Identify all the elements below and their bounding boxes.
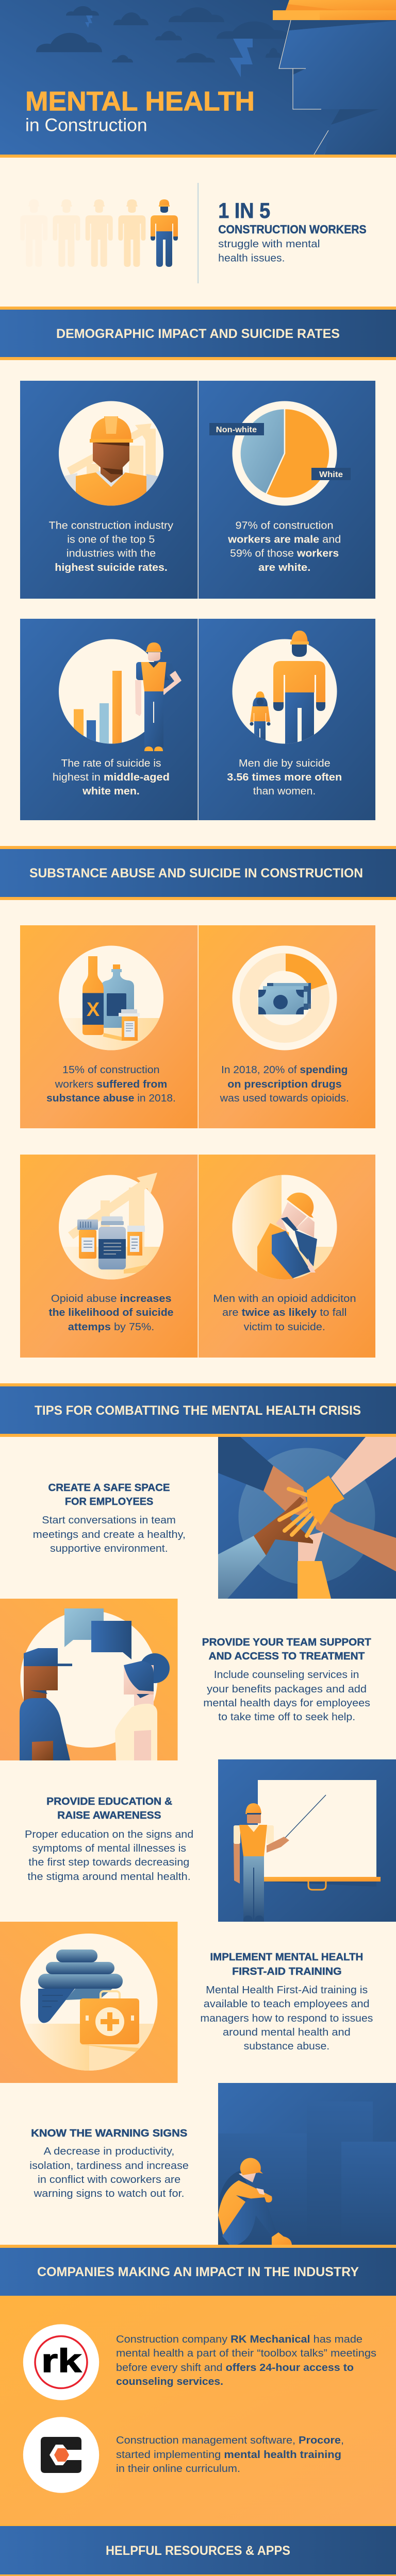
text: 97% of construction xyxy=(235,520,333,532)
text: Men die by suicide xyxy=(239,758,331,769)
icon: stacked hands xyxy=(218,1437,396,1599)
panel: opioid abuse stat xyxy=(20,1155,198,1358)
text: Construction management software, Procore , xyxy=(116,2435,344,2446)
text: The rate of suicide is xyxy=(61,758,161,769)
text: RAISE AWARENESS xyxy=(57,1809,161,1821)
icon: pill bottles and rising chart xyxy=(57,1173,165,1283)
text: than women. xyxy=(253,786,316,797)
pie chart: Non-white xyxy=(216,426,257,434)
text: In 2018, 20% of spending xyxy=(221,1064,348,1076)
text xyxy=(48,1293,173,1333)
text: 1 in 5: health issues. xyxy=(218,253,285,264)
text xyxy=(202,1636,371,1723)
text: mental health a part of their “toolbox talks” meetings xyxy=(116,2348,376,2359)
tip: support and treatment xyxy=(0,1599,371,1760)
text: is one of the top 5 xyxy=(67,534,155,545)
text: white men. xyxy=(82,786,140,797)
panel: top 5 industries xyxy=(20,381,198,599)
text: attemps by 75%. xyxy=(68,1321,154,1333)
subtitle: in Construction xyxy=(25,115,147,135)
text: IMPLEMENT MENTAL HEALTH xyxy=(210,1951,363,1963)
text: meetings and create a healthy, xyxy=(33,1529,186,1540)
icon: bottles: X xyxy=(87,999,100,1021)
text: substance abuse in 2018. xyxy=(46,1093,176,1104)
text: Start conversations in team xyxy=(42,1515,176,1526)
panel: middle-aged white men xyxy=(20,619,198,820)
text: was used towards opioids. xyxy=(220,1093,349,1104)
text: warning signs to watch out for. xyxy=(34,2188,185,2199)
text: before every shift and offers 24-hour access to xyxy=(116,2362,354,2374)
text: PROVIDE EDUCATION & xyxy=(46,1795,172,1807)
pie chart: White xyxy=(319,470,343,479)
text xyxy=(53,758,170,797)
donut chart xyxy=(232,946,337,1050)
icon: standing worker xyxy=(135,642,182,751)
heading banner: tips: TIPS FOR COMBATTING THE MENTAL HEALTH CRISIS xyxy=(35,1403,361,1418)
icon: distressed worker xyxy=(231,1172,338,1283)
text: workers suffered from xyxy=(55,1079,167,1090)
tip: education xyxy=(25,1759,396,1922)
icon: first-aid kit and helmet xyxy=(0,1922,177,2083)
text: around mental health and xyxy=(223,2027,351,2038)
panel: substance abuse stat xyxy=(20,925,198,1128)
logo: rk xyxy=(23,2324,99,2400)
text: victim to suicide. xyxy=(244,1321,325,1333)
logo: Procore xyxy=(23,2417,99,2493)
text: to take time off to seek help. xyxy=(218,1711,355,1723)
text: highest in middle-aged xyxy=(53,772,170,783)
text: started implementing mental health training xyxy=(116,2449,341,2461)
text: the stigma around mental health. xyxy=(27,1871,191,1883)
icon: bottles xyxy=(57,946,165,1054)
text: A decrease in productivity, xyxy=(44,2146,174,2157)
tip: safe space xyxy=(33,1437,396,1599)
text: AND ACCESS TO TREATMENT xyxy=(209,1650,365,1662)
text: CREATE A SAFE SPACE xyxy=(48,1482,170,1494)
text: supportive environment. xyxy=(50,1543,168,1554)
text: the likelihood of suicide xyxy=(48,1307,173,1318)
text: 1 in 5: CONSTRUCTION WORKERS xyxy=(218,223,367,236)
icon: money xyxy=(258,983,311,1014)
text xyxy=(116,2435,344,2475)
text: Proper education on the signs and xyxy=(25,1829,193,1840)
text: in their online curriculum. xyxy=(116,2463,240,2475)
text: substance abuse. xyxy=(244,2041,329,2052)
text xyxy=(33,1482,186,1554)
text xyxy=(48,520,173,573)
text: 59% of those workers xyxy=(230,548,339,560)
text: 1 in 5: struggle with mental xyxy=(218,239,320,250)
icon: storm clouds xyxy=(36,6,290,62)
text: workers are male and xyxy=(227,534,341,545)
text: FIRST-AID TRAINING xyxy=(232,1965,342,1977)
text: The construction industry xyxy=(48,520,173,532)
text: 15% of construction xyxy=(62,1064,160,1076)
text xyxy=(29,2127,189,2199)
icon: man and woman figures xyxy=(250,631,325,744)
panel: opioid addiction stat xyxy=(199,1155,375,1358)
icon: worker at whiteboard xyxy=(218,1759,396,1922)
text: available to teach employees and xyxy=(204,1998,370,2010)
text: industries with the xyxy=(67,548,156,560)
text xyxy=(25,1795,193,1883)
heading banner: companies xyxy=(0,2245,396,2296)
divider: hero stripe xyxy=(0,155,396,158)
text xyxy=(46,1064,176,1104)
panel: 1 in 5 stat xyxy=(20,183,367,283)
text: Opioid abuse increases xyxy=(51,1293,172,1304)
text: Construction company RK Mechanical has made xyxy=(116,2334,362,2345)
icon: head profile with hard hat xyxy=(273,0,396,155)
icon: conversation xyxy=(0,1599,177,1760)
text: in conflict with coworkers are xyxy=(38,2174,180,2185)
text: 3.56 times more often xyxy=(227,772,342,783)
pie chart xyxy=(209,401,351,506)
text: FOR EMPLOYEES xyxy=(65,1496,153,1507)
panel: companies xyxy=(0,2296,396,2524)
text: 1 in 5: 1 IN 5 xyxy=(218,198,270,223)
text: symptoms of mental illnesses is xyxy=(32,1843,186,1854)
text: managers how to respond to issues xyxy=(200,2013,373,2024)
tip: first aid training xyxy=(0,1922,373,2083)
text xyxy=(227,758,342,797)
title: MENTAL HEALTH xyxy=(25,86,255,116)
heading banner: substance abuse xyxy=(0,846,396,900)
icon: sitting worker xyxy=(218,2083,396,2245)
text xyxy=(227,520,341,573)
icon: five workers xyxy=(20,199,178,267)
bar chart xyxy=(74,671,122,748)
text: PROVIDE YOUR TEAM SUPPORT xyxy=(202,1636,371,1648)
heading banner: demographic xyxy=(0,307,396,360)
heading banner: tips xyxy=(0,1383,396,1437)
text xyxy=(213,1293,356,1333)
text: the first step towards decreasing xyxy=(28,1857,189,1868)
text: isolation, tardiness and increase xyxy=(29,2160,189,2172)
panel: spending stat xyxy=(199,925,375,1128)
text: are white. xyxy=(258,562,310,573)
text: Mental Health First-Aid training is xyxy=(206,1985,368,1996)
heading banner: demographic: DEMOGRAPHIC IMPACT AND SUICIDE RATES xyxy=(56,327,340,341)
panel: male and white workers xyxy=(199,381,375,599)
heading banner: substance abuse: SUBSTANCE ABUSE AND SUICIDE IN CONSTRUCTION xyxy=(29,866,363,880)
heading banner: resources: HELPFUL RESOURCES & APPS xyxy=(106,2544,290,2558)
text xyxy=(116,2334,376,2387)
text xyxy=(220,1064,349,1104)
text: on prescription drugs xyxy=(227,1079,342,1090)
text: are twice as likely to fall xyxy=(222,1307,346,1318)
text: Men with an opioid addiciton xyxy=(213,1293,356,1304)
text: counseling services. xyxy=(116,2376,223,2387)
text: mental health days for employees xyxy=(203,1698,370,1709)
heading banner: companies: COMPANIES MAKING AN IMPACT IN THE INDUSTRY xyxy=(37,2265,359,2279)
logo: rk: rk xyxy=(41,2342,82,2379)
text: your benefits packages and add xyxy=(207,1684,367,1695)
company: Procore xyxy=(23,2417,344,2493)
icon: construction worker xyxy=(59,401,163,510)
panel: men die by suicide xyxy=(199,619,375,820)
icon: lightning bolts xyxy=(85,15,253,77)
tip: warning signs xyxy=(29,2083,396,2245)
text: Include counseling services in xyxy=(214,1669,359,1681)
text: highest suicide rates. xyxy=(55,562,168,573)
company: RK Mechanical xyxy=(23,2324,376,2400)
text: KNOW THE WARNING SIGNS xyxy=(31,2127,187,2139)
text: 1 in 5 xyxy=(218,198,367,264)
heading banner: resources xyxy=(0,2524,396,2576)
panel: header hero xyxy=(0,0,396,155)
text xyxy=(200,1951,373,2052)
